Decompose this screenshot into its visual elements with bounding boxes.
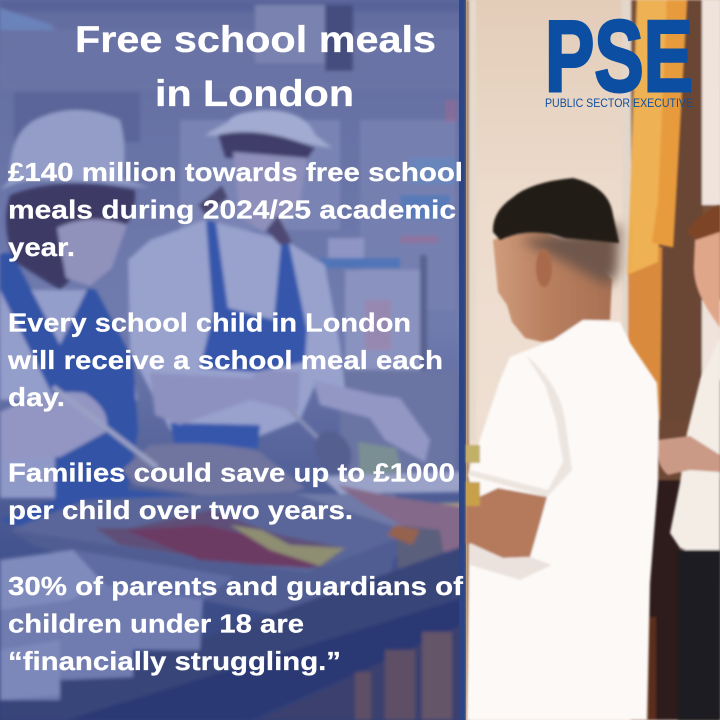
text block: every child: will receive a school meal each	[7, 345, 443, 375]
counter	[0, 545, 466, 720]
text block: every child	[7, 308, 443, 412]
logo: PSE: PUBLIC SECTOR EXECUTIVE	[545, 98, 693, 110]
navy edge strip	[459, 0, 466, 720]
side tray	[0, 550, 233, 700]
left chef body	[0, 250, 138, 400]
back tray	[267, 493, 417, 533]
ladles	[53, 387, 157, 467]
text block: funding: meals during 2024/25 academic	[8, 194, 456, 224]
main boy	[466, 230, 659, 720]
text block: funding: £140 million towards free school	[8, 157, 463, 187]
right chef apron	[200, 220, 307, 372]
title: in London	[155, 73, 354, 114]
hair fade	[520, 225, 620, 284]
text block: family savings: Families could save up to £1000	[8, 458, 455, 488]
hats	[0, 110, 150, 190]
hair	[493, 178, 619, 287]
salad plate	[358, 442, 402, 475]
text block: every child: Every school child in London	[8, 308, 411, 338]
text block: family savings: per child over two years.	[8, 495, 353, 525]
text block: funding: year.	[8, 232, 75, 262]
metal tray	[10, 492, 413, 573]
lower dark area	[648, 480, 720, 720]
text block: family savings	[8, 458, 455, 525]
ceiling and wall tones	[0, 0, 466, 12]
text block: every child: day.	[8, 382, 65, 412]
text block: funding	[8, 157, 463, 262]
neck and face	[493, 230, 612, 342]
wooden planks	[628, 247, 662, 428]
title	[75, 19, 436, 114]
sleeve fold shading	[468, 355, 572, 497]
title: Free school meals	[75, 19, 436, 60]
right chef body	[128, 220, 345, 440]
text block: struggling parents: “financially struggling.”	[8, 646, 341, 676]
faces and hair	[6, 184, 135, 290]
panel: school children photo	[466, 0, 720, 720]
serving arm	[337, 485, 466, 567]
arm	[466, 488, 547, 558]
text block: struggling parents: children under 18 are	[8, 608, 304, 638]
shirt shadow	[470, 543, 552, 580]
T-shirt	[467, 320, 659, 720]
back wall	[631, 0, 720, 720]
right boy	[657, 205, 720, 720]
text block: struggling parents	[8, 571, 463, 676]
left chef apron	[0, 253, 240, 545]
middle arm	[122, 444, 305, 497]
left chef forearm	[0, 392, 107, 460]
arms and hands	[150, 370, 300, 425]
wood front	[257, 623, 466, 720]
panel: kitchen photo with blue overlay	[0, 0, 466, 720]
door frame	[466, 0, 469, 720]
text block: struggling parents: 30% of parents and guardians of	[8, 571, 463, 601]
